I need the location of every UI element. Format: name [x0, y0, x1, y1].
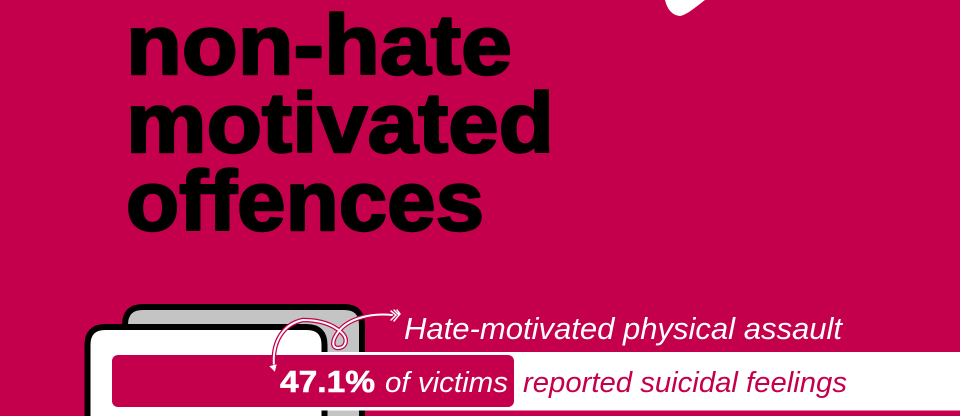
icon: stacked cards: [88, 307, 362, 416]
title: [126, 0, 554, 248]
title: non-hate: [126, 0, 512, 92]
stat: 47.1%: 47.1%: [280, 364, 375, 399]
text: of victims: of victims: [385, 367, 508, 399]
title: motivated: [126, 76, 554, 170]
decorative white swoosh: [665, 0, 705, 16]
stat pill: [112, 355, 514, 407]
title: offences: [126, 154, 484, 248]
white stat band: [320, 352, 960, 410]
text: reported suicidal feelings: reported suicidal feelings: [523, 367, 847, 399]
arrow: looping callout: [269, 310, 400, 372]
heading: hate-motivated physical assault: Hate-motivated physical assault: [404, 311, 843, 346]
